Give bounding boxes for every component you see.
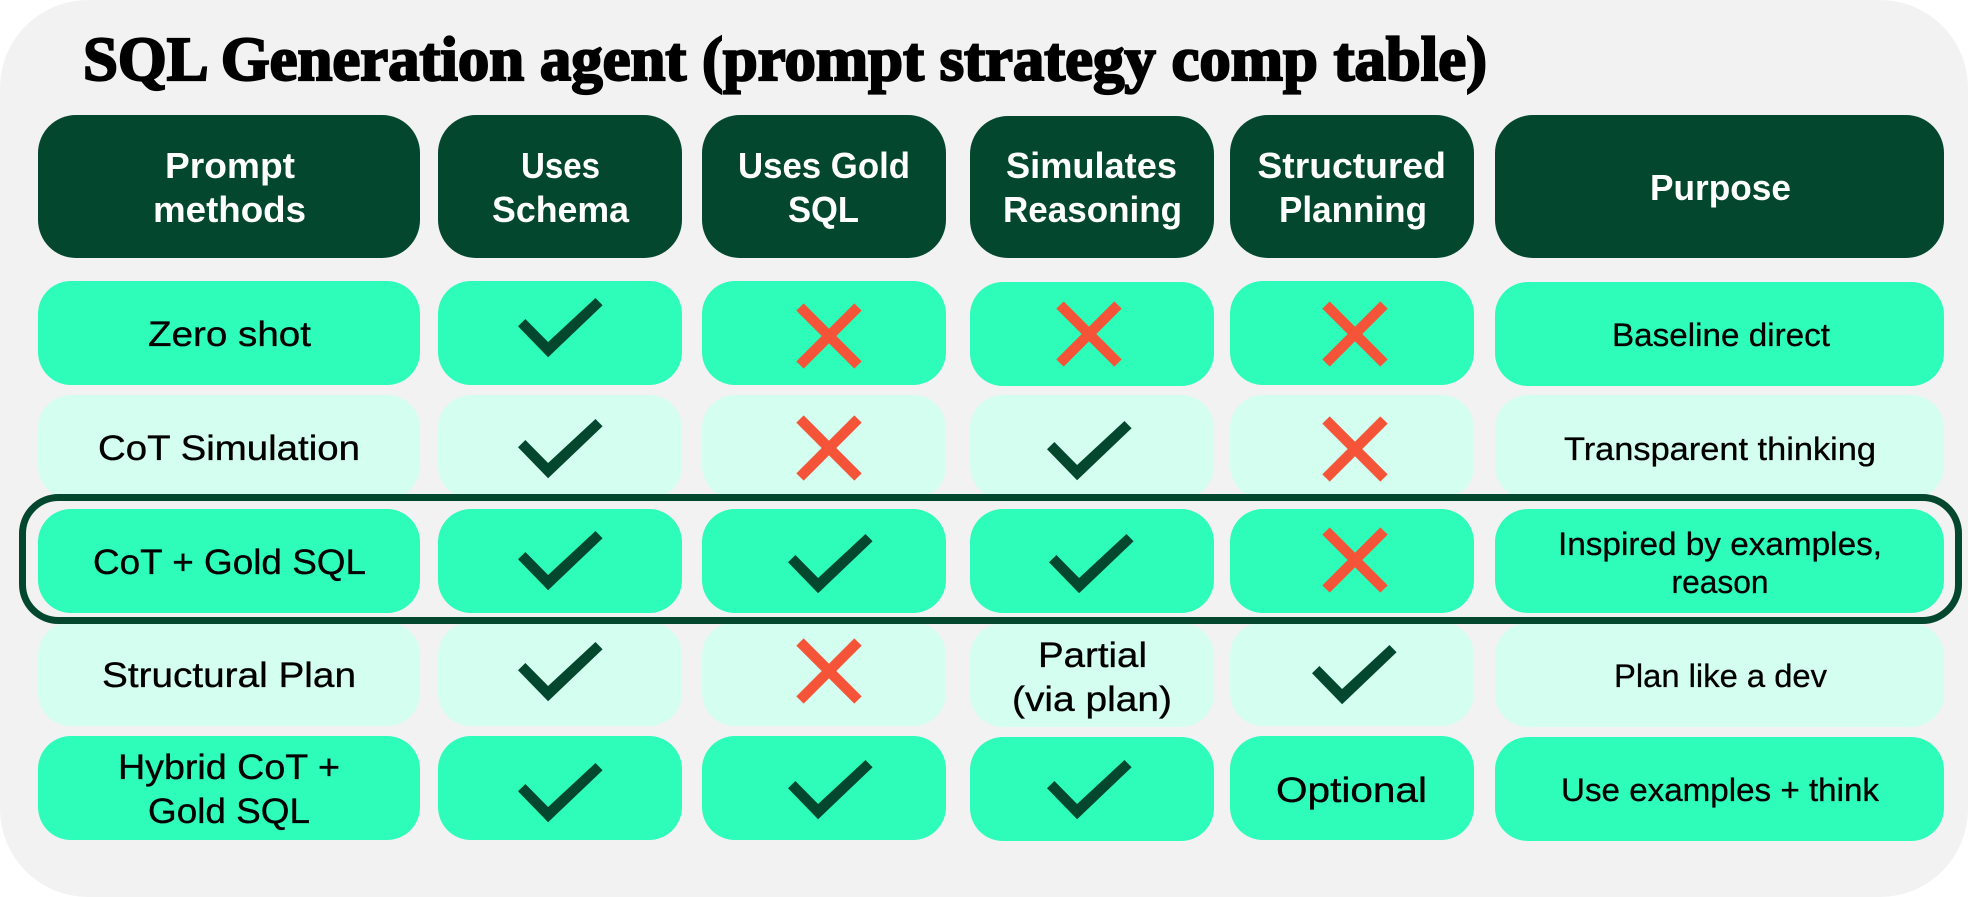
cell: planning cross (1230, 395, 1474, 499)
cell: Plan like a dev (1495, 623, 1944, 727)
cell: planning optional (1230, 736, 1474, 840)
cell: Hybrid CoT + Gold SQL: Gold SQL (148, 792, 310, 831)
cell: Inspired by examples, reason: Inspired by examples, (1558, 526, 1882, 562)
header: Uses Schema: Schema (492, 189, 630, 230)
cell: reasoning cross (970, 282, 1214, 386)
cell: reasoning partial: (via plan) (1012, 680, 1172, 719)
header: Uses Gold SQL: Uses Gold (738, 145, 910, 186)
header: Uses Gold SQL (702, 115, 946, 258)
header: Structured Planning: Structured (1257, 145, 1446, 186)
header: Purpose: Purpose (1650, 167, 1791, 208)
cell: CoT + Gold SQL: CoT + Gold SQL (93, 543, 366, 582)
cell: Transparent thinking (1495, 395, 1944, 499)
cell: CoT + Gold SQL (38, 509, 420, 613)
cell: planning optional: Optional (1276, 771, 1427, 810)
header: Purpose (1495, 115, 1944, 258)
cell: reasoning check (970, 395, 1214, 499)
header: Uses Schema: Uses (521, 145, 600, 186)
cell: Inspired by examples, reason (1495, 509, 1944, 613)
title: SQL Generation agent (prompt strategy comp table) (83, 26, 1487, 94)
cell: Structural Plan: Structural Plan (102, 656, 356, 695)
cell: Hybrid CoT + Gold SQL (38, 736, 420, 840)
cell: planning check (1230, 622, 1474, 726)
header: Simulates Reasoning: Reasoning (1003, 189, 1182, 230)
cell: planning cross (1230, 281, 1474, 385)
cell: gold SQL cross (702, 622, 946, 726)
cell: schema check (438, 622, 682, 726)
header: Structured Planning (1230, 115, 1474, 258)
cell: schema check (438, 281, 682, 385)
cell: schema check (438, 509, 682, 613)
header: Uses Schema (438, 115, 682, 258)
table header row (38, 115, 1944, 258)
cell: Plan like a dev: Plan like a dev (1614, 658, 1827, 694)
cell: gold SQL check (702, 736, 946, 840)
cell: schema check (438, 395, 682, 499)
highlight frame around CoT + Gold SQL row (22, 498, 1958, 620)
header: Prompt methods (38, 115, 420, 258)
cell: Zero shot: Zero shot (148, 315, 311, 354)
cell: Transparent thinking: Transparent thinking (1564, 431, 1876, 467)
cell: CoT Simulation: CoT Simulation (98, 429, 360, 468)
cell: gold SQL cross (702, 395, 946, 499)
header: Uses Gold SQL: SQL (788, 189, 859, 230)
header: Simulates Reasoning: Simulates (1006, 145, 1177, 186)
cell: Hybrid CoT + Gold SQL: Hybrid CoT + (118, 748, 340, 787)
row: Hybrid CoT + Gold SQL (38, 736, 1944, 841)
cell: schema check (438, 736, 682, 840)
cell: Use examples + think: Use examples + think (1561, 772, 1880, 808)
cell: Baseline direct: Baseline direct (1612, 317, 1830, 353)
cell: reasoning check (970, 737, 1214, 841)
cell: Use examples + think (1495, 737, 1944, 841)
cell: gold SQL cross (702, 281, 946, 385)
cell: reasoning partial: Partial (1038, 636, 1147, 675)
cell: reasoning partial (970, 623, 1214, 727)
row: Structural Plan (38, 622, 1944, 727)
cell: reasoning check (970, 509, 1214, 613)
cell: gold SQL check (702, 509, 946, 613)
cell: Structural Plan (38, 622, 420, 726)
row: CoT + Gold SQL (38, 509, 1944, 613)
header: Simulates Reasoning (970, 116, 1214, 258)
cell: Baseline direct (1495, 282, 1944, 386)
header: Prompt methods: methods (153, 189, 306, 230)
cell: Zero shot (38, 281, 420, 385)
header: Prompt methods: Prompt (165, 145, 295, 186)
row: Zero shot (38, 281, 1944, 386)
cell: CoT Simulation (38, 395, 420, 499)
cell: Inspired by examples, reason: reason (1672, 564, 1768, 600)
header: Structured Planning: Planning (1279, 189, 1427, 230)
cell: planning cross (1230, 509, 1474, 613)
row: CoT Simulation (38, 395, 1944, 499)
